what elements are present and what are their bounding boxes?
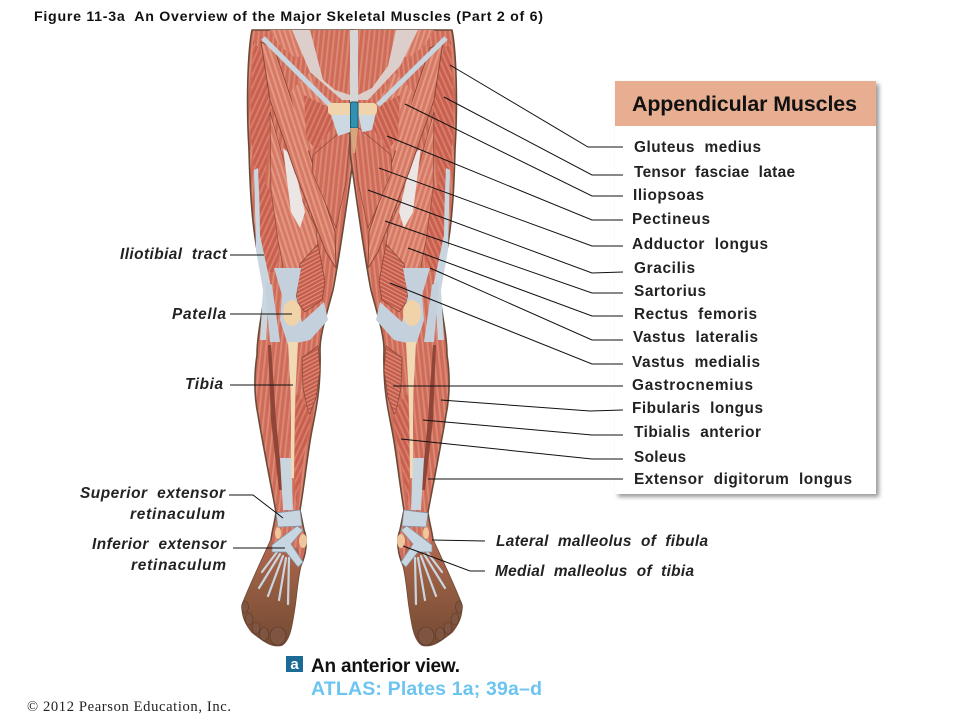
left and ankle italic labels: Medial malleolus of tibia bbox=[495, 563, 694, 580]
panel body bbox=[615, 81, 876, 494]
muscle labels: Adductor longus bbox=[632, 236, 768, 253]
muscle labels: Vastus lateralis bbox=[633, 329, 758, 346]
linea alba bbox=[350, 30, 358, 104]
ankle tan malleolus bbox=[299, 534, 307, 548]
toes bbox=[242, 601, 286, 645]
muscle labels: Soleus bbox=[634, 449, 686, 466]
iliopsoas bbox=[290, 72, 328, 152]
atlas reference: ATLAS: Plates 1a; 39a–d bbox=[311, 678, 542, 700]
muscle labels: Sartorius bbox=[634, 283, 706, 300]
abdomen and pelvis bbox=[263, 30, 446, 153]
abdominal muscle right bbox=[358, 30, 396, 95]
panel header bbox=[615, 81, 876, 126]
caption badge: a bbox=[290, 656, 299, 673]
left and ankle italic labels: Patella bbox=[172, 306, 226, 323]
muscle labels: Tibialis anterior bbox=[634, 424, 761, 441]
muscle labels: Gluteus medius bbox=[634, 139, 761, 156]
left leg bbox=[242, 30, 354, 646]
muscle labels: Gracilis bbox=[634, 260, 695, 277]
muscle labels: Vastus medialis bbox=[632, 354, 760, 371]
caption badge bbox=[286, 656, 303, 673]
panel: appendicular muscles bbox=[615, 81, 876, 494]
foot tendons bbox=[259, 552, 289, 604]
muscle labels: Fibularis longus bbox=[632, 400, 763, 417]
left and ankle italic labels: Lateral malleolus of fibula bbox=[496, 533, 708, 550]
lower leg lateral muscles bbox=[258, 346, 290, 460]
callout lines: right side bbox=[229, 65, 623, 571]
tensor fasciae latae bbox=[250, 40, 272, 200]
gastrocnemius bbox=[302, 346, 320, 416]
left and ankle italic labels: retinaculum bbox=[130, 506, 225, 523]
left and ankle italic labels: Iliotibial tract bbox=[120, 246, 228, 263]
left and ankle italic labels: Inferior extensor bbox=[92, 536, 227, 553]
patella bbox=[283, 300, 301, 326]
pectineus bbox=[304, 95, 336, 150]
rectus femoris tendon streak bbox=[283, 148, 305, 228]
muscle labels: Rectus femoris bbox=[634, 306, 757, 323]
foot bbox=[242, 540, 301, 646]
muscle labels: Iliopsoas bbox=[633, 187, 704, 204]
title: Figure 11-3a An Overview of the Major Skeletal Muscles (Part 2 of 6) bbox=[34, 9, 543, 25]
caption: An anterior view. bbox=[311, 656, 460, 677]
muscle labels bbox=[632, 139, 852, 488]
pale fascia bbox=[292, 30, 418, 100]
inguinal ligaments bbox=[263, 38, 446, 105]
tibialis tendon bbox=[280, 458, 293, 510]
muscle labels: Pectineus bbox=[632, 211, 710, 228]
anatomical illustration: legs bbox=[242, 30, 462, 646]
pubic tendons bbox=[330, 112, 376, 136]
left and ankle italic labels: Superior extensor bbox=[80, 485, 226, 502]
left and ankle italic labels: retinaculum bbox=[131, 557, 226, 574]
vastus medialis bbox=[296, 244, 325, 312]
retinacula bbox=[276, 510, 302, 527]
leg silhouette bbox=[242, 30, 354, 646]
iliotibial tract bbox=[254, 168, 270, 340]
muscle labels: Gastrocnemius bbox=[632, 377, 753, 394]
muscle labels: Extensor digitorum longus bbox=[634, 471, 852, 488]
right leg (mirror) bbox=[350, 30, 462, 646]
copyright: © 2012 Pearson Education, Inc. bbox=[27, 699, 231, 715]
vastus lateralis bbox=[259, 175, 280, 272]
left and ankle italic labels: Tibia bbox=[185, 376, 223, 393]
adductor longus bbox=[312, 128, 350, 228]
pubic bar bbox=[328, 103, 377, 115]
soleus bbox=[294, 392, 311, 505]
crotch bbox=[350, 128, 358, 153]
left and ankle italic labels bbox=[80, 246, 708, 580]
tibia bbox=[288, 342, 298, 478]
sartorius bbox=[261, 42, 336, 268]
muscle labels: Tensor fasciae latae bbox=[634, 164, 795, 181]
iliac patch bbox=[270, 30, 310, 58]
rectus femoris bbox=[270, 112, 319, 272]
blue cord bbox=[350, 102, 358, 128]
abdominal muscle left bbox=[310, 30, 350, 95]
panel heading: Appendicular Muscles bbox=[632, 92, 857, 116]
knee tendons bbox=[274, 268, 328, 345]
